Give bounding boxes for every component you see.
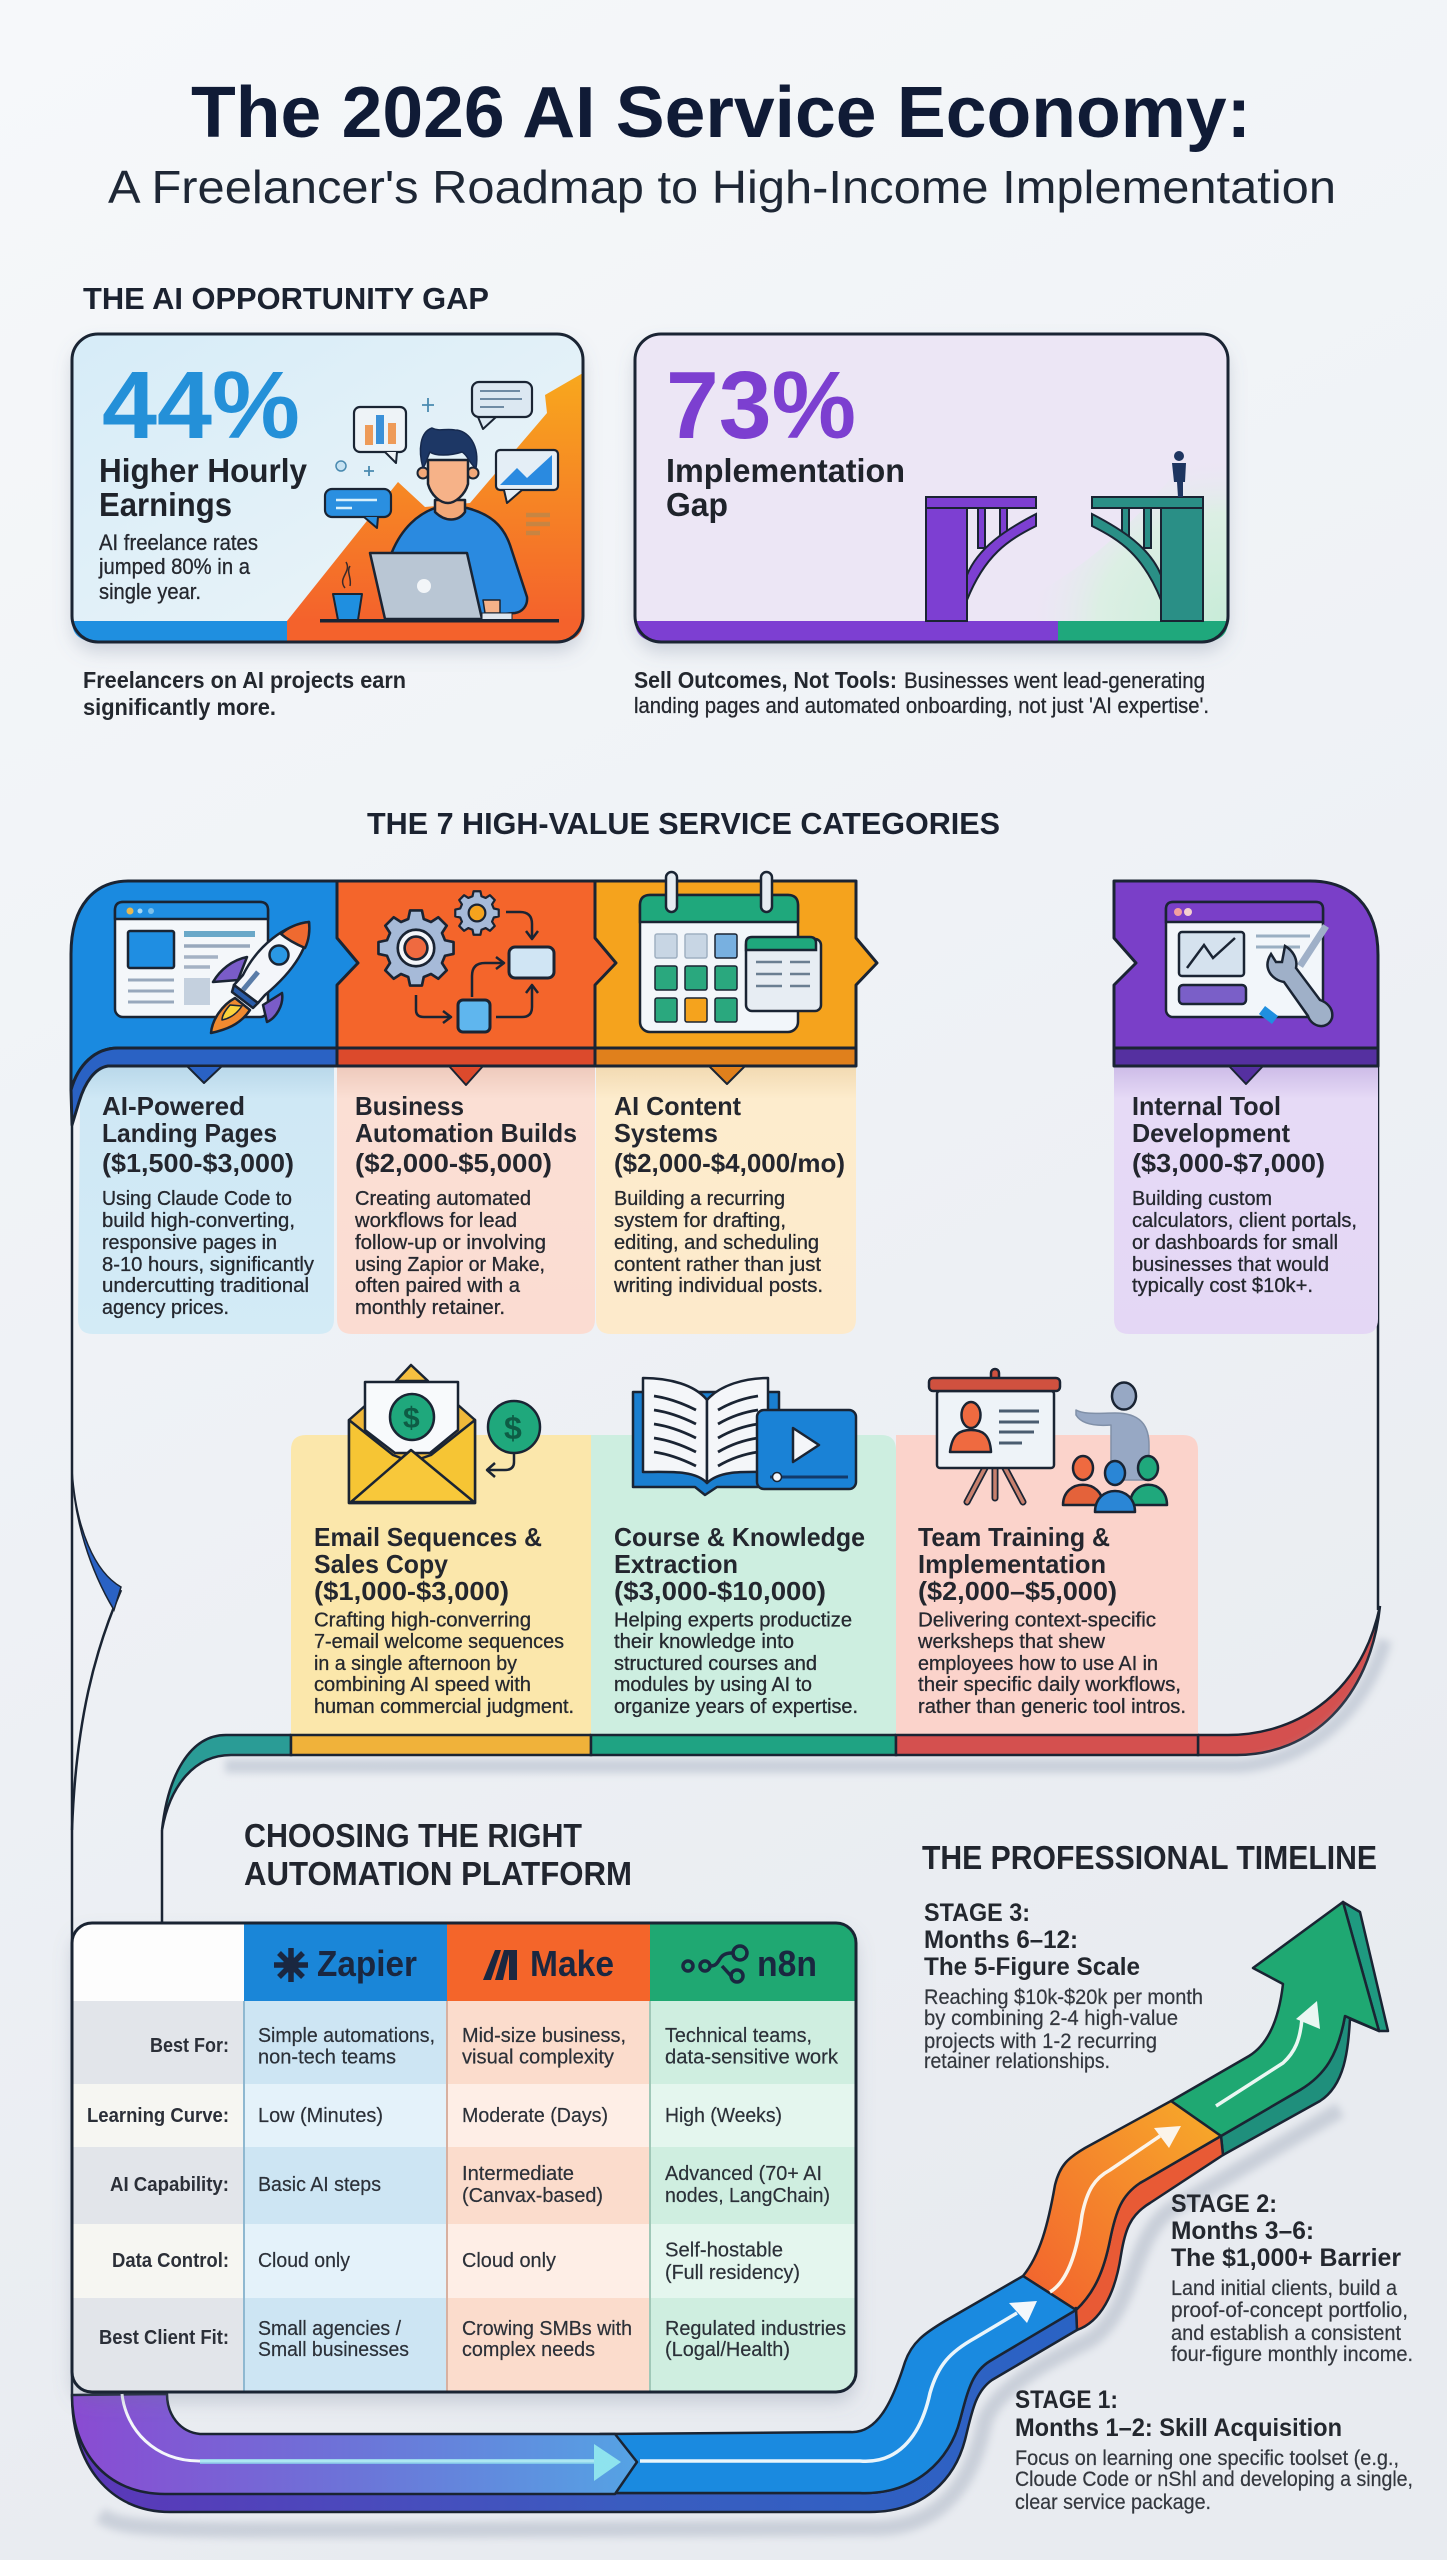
caption: sell outcomes [634,667,1209,718]
table row labels: Best Client Fit: [99,2327,229,2349]
icon: person on bridge [1172,451,1186,497]
card text: Extraction [614,1549,738,1579]
panel: team training and implementation [896,1435,1198,1755]
table body cells [72,2001,856,2392]
n8n column: Regulated industries [665,2318,846,2340]
n8n column [665,2025,846,2361]
card text: employees how to use AI in [918,1653,1158,1675]
card text: ($3,000-$7,000) [1132,1148,1325,1178]
stat label [99,452,308,523]
card text: 8-10 hours, significantly [102,1254,314,1276]
card text: undercutting traditional [102,1275,309,1297]
zapier column: Basic AI steps [258,2174,381,2196]
make column: Mid-size business, [462,2025,626,2047]
zapier column: Cloud only [258,2250,350,2272]
card text: werksheps that shew [917,1631,1106,1653]
table header: Make [530,1943,614,1984]
card text: agency prices. [102,1297,229,1319]
heading: professional timeline: THE PROFESSIONAL TIMELINE [922,1839,1377,1876]
card text: often paired with a [355,1275,521,1297]
table row labels: Best For: [150,2035,229,2057]
zapier column: Low (Minutes) [258,2105,383,2127]
icon: email envelope with money: $ [504,1410,522,1446]
card text [613,1091,845,1297]
subtitle: A Freelancer's Roadmap to High-Income Implementation [108,161,1336,213]
heading: the AI opportunity gap: THE AI OPPORTUNITY GAP [83,281,489,316]
card text: Delivering context-specific [918,1610,1156,1632]
text block: stage 3: The 5-Figure Scale [924,1953,1140,1981]
card text [314,1522,574,1718]
arrow tip side [1343,1902,1388,2031]
card text: AI Content [614,1091,741,1121]
panel: course and knowledge extraction [591,1435,896,1755]
panel: AI content systems [596,1067,856,1334]
stat: 44%: 44% [102,352,300,459]
card text: or dashboards for small [1132,1232,1338,1254]
rocket [211,922,309,1033]
zapier column: non-tech teams [258,2046,396,2068]
ribbon: roadmap stage path [72,1902,1388,2512]
caption: sell outcomes: landing pages and automated onboarding, not just 'AI expertise'. [634,693,1209,718]
card text: Landing Pages [102,1118,277,1148]
n8n column: High (Weeks) [665,2105,782,2127]
card text: Building a recurring [614,1188,785,1210]
make column: complex needs [462,2339,595,2361]
card text: their knowledge into [614,1631,794,1653]
band [896,1735,1198,1755]
table header: n8n [757,1943,817,1984]
green arrow side [1221,2016,1379,2155]
panel: business automation builds [337,1067,595,1334]
stat: 73%: 73% [666,352,856,459]
text block: stage 2 [1171,2190,1413,2366]
heading: service categories: THE 7 HIGH-VALUE SERVICE CATEGORIES [367,806,1000,841]
text block: stage 1: STAGE 1: [1015,2386,1118,2414]
card background [1114,1067,1378,1334]
card text: build high-converting, [102,1210,295,1232]
card text: writing individual posts. [613,1275,823,1297]
table row labels: AI Capability: [110,2174,229,2196]
card text: Systems [614,1118,718,1148]
n8n column: (Full residency) [665,2262,800,2284]
text block: stage 3: Months 6–12: [924,1926,1078,1954]
table header: Zapier [317,1943,417,1984]
header band: purple [1114,881,1378,1084]
arrow: stage 1 [640,2301,1037,2461]
n8n column: (Logal/Health) [665,2339,790,2361]
orange top [1023,2101,1221,2310]
card text: ($2,000-$5,000) [355,1148,552,1178]
band [591,1735,896,1755]
header band: amber [595,881,877,1084]
blue and purple side [72,2308,1077,2512]
card text: Sales Copy [314,1549,449,1579]
icon: presenter and audience [929,1369,1167,1512]
text block: stage 2: Months 3–6: [1171,2217,1314,2245]
caption: freelancers: significantly more. [83,694,276,720]
arrow: stage 3 [1216,2001,1320,2106]
icon: n8n [683,1946,747,1982]
stat label: Implementation [666,452,905,489]
card text: Automation Builds [355,1118,577,1148]
card text: structured courses and [614,1653,817,1675]
table row labels: Data Control: [112,2250,229,2272]
card text: Creating automated [355,1188,531,1210]
text block: stage 3: retainer relationships. [924,2050,1110,2073]
header band: blue [71,881,358,1125]
stat label [666,452,905,523]
text block: stage 3: Reaching $10k-$20k per month [924,1986,1203,2009]
make column: Moderate (Days) [462,2105,608,2127]
heading: choosing the right automation platform: AUTOMATION PLATFORM [244,1855,632,1892]
n8n column: Self-hostable [665,2240,783,2262]
icon: landing page and rocket [115,902,309,1033]
text block: stage 2: and establish a consistent [1171,2322,1401,2345]
card text: Crafting high-converring [314,1610,531,1632]
blue top [600,2276,1076,2493]
arrow: white path line, purple segment [122,2394,621,2481]
title: The 2026 AI Service Economy: [191,73,1251,153]
card text: Business [355,1091,464,1121]
table row labels: Learning Curve: [87,2105,229,2127]
make column: (Canvax-based) [462,2185,603,2207]
text block: stage 2: STAGE 2: [1171,2190,1277,2218]
card text: responsive pages in [102,1232,277,1254]
card text: typically cost $10k+. [1132,1275,1313,1297]
stat label: Higher Hourly [99,452,308,489]
card background [596,1067,856,1334]
card text: Course & Knowledge [614,1522,865,1552]
text block: stage 1 [1015,2386,1413,2514]
path outline: left and right rails [72,960,1378,2395]
card text: Implementation [918,1549,1106,1579]
panel: internal tool development [1114,1067,1378,1334]
card text: ($2,000–$5,000) [918,1576,1117,1606]
card text: ($1,000-$3,000) [314,1576,509,1606]
card text: human commercial judgment. [314,1696,574,1718]
icon: gears and workflow [378,891,554,1032]
n8n column: Technical teams, [665,2025,812,2047]
card text: businesses that would [1132,1254,1329,1276]
ribbon: blue sliver on left rail [72,1470,121,1610]
arrow: stage 2 [1050,2126,1181,2292]
text block: stage 1: Months 1–2: Skill Acquisition [1015,2414,1342,2442]
stat description [98,530,258,604]
card text: their specific daily workflows, [918,1674,1181,1696]
heading: choosing the right automation platform [244,1817,632,1892]
caption: sell outcomes: Businesses went lead-generating [904,668,1205,693]
card text [102,1091,314,1319]
card text: Using Claude Code to [102,1188,292,1210]
icon: zapier [274,1948,308,1982]
icon: internal tool dashboard and wrench [1166,902,1332,1026]
text block: stage 3: STAGE 3: [924,1899,1030,1927]
stat label: Earnings [99,486,232,523]
card text: Development [1132,1118,1290,1148]
card text: system for drafting, [614,1210,786,1232]
ribbon shadow [225,1640,1385,1766]
card background [291,1435,591,1735]
card text: combining AI speed with [314,1674,531,1696]
card text: in a single afternoon by [314,1653,517,1675]
text block: stage 2: Land initial clients, build a [1171,2277,1397,2300]
make column: Intermediate [462,2163,574,2185]
panel: 44% higher hourly earnings [72,334,583,642]
make column: Cloud only [462,2250,556,2272]
n8n column: data-sensitive work [665,2046,839,2068]
caption: freelancers: Freelancers on AI projects earn [83,667,406,693]
text block: stage 2: The $1,000+ Barrier [1171,2244,1401,2272]
text block: stage 3: by combining 2-4 high-value [924,2007,1178,2030]
card text [354,1091,577,1319]
icon: freelancer at laptop [320,382,559,622]
band [291,1735,591,1755]
stat description: single year. [99,579,201,604]
stat description: jumped 80% in a [98,554,251,579]
stat description: AI freelance rates [99,530,258,555]
ribbon: teal left curve [162,1735,291,1925]
card text: follow-up or involving [355,1232,546,1254]
card text: modules by using AI to [614,1674,812,1696]
text block: stage 1: Focus on learning one specific toolset (e.g., [1015,2447,1399,2470]
card background [78,1067,334,1334]
card text: Team Training & [918,1522,1110,1552]
card text [1132,1091,1357,1297]
panel: email sequences [291,1435,591,1755]
make column [462,2025,632,2361]
card text: using Zapior or Make, [355,1254,545,1276]
card text: editing, and scheduling [614,1232,819,1254]
ribbon: red right curve [1198,1606,1380,1755]
header band: orange [337,881,616,1085]
heading: choosing the right automation platform: CHOOSING THE RIGHT [244,1817,582,1854]
text block: stage 3 [924,1899,1203,2073]
icon: email envelope with money: $ [403,1402,420,1435]
zapier column: Simple automations, [258,2025,435,2047]
purple top [72,2394,637,2494]
card text: rather than generic tool intros. [918,1696,1186,1718]
panel: 73% implementation gap [635,334,1228,642]
card text: Email Sequences & [314,1522,542,1552]
card background [337,1067,595,1334]
n8n column: nodes, LangChain) [665,2185,830,2207]
n8n column: Advanced (70+ AI [665,2163,822,2185]
caption: freelancers [83,667,406,720]
card text: 7-email welcome sequences [314,1631,564,1653]
caption: sell outcomes: Sell Outcomes, Not Tools: [634,667,897,693]
icon: make [483,1950,517,1980]
card text: Building custom [1132,1188,1272,1210]
make column: visual complexity [462,2046,614,2068]
icon: content calendar [640,872,821,1032]
card text: AI-Powered [102,1091,245,1121]
icon: broken bridge [926,451,1203,621]
card text: Helping experts productize [614,1610,852,1632]
text block: stage 1: clear service package. [1015,2491,1211,2514]
icon: open book and video [633,1378,856,1495]
card background [591,1435,896,1735]
card text [614,1522,865,1718]
text block: stage 2: four-figure monthly income. [1171,2343,1413,2366]
card text: ($2,000-$4,000/mo) [614,1148,845,1178]
card text: calculators, client portals, [1132,1210,1357,1232]
card text: Internal Tool [1132,1091,1281,1121]
zapier column [258,2025,435,2361]
text block: stage 2: proof-of-concept portfolio, [1171,2299,1408,2322]
icon: email envelope with money [349,1365,540,1503]
text block: stage 3: projects with 1-2 recurring [924,2030,1157,2053]
panel: platform comparison table [72,1923,856,2392]
table row labels [87,2035,229,2349]
card background [896,1435,1198,1735]
card text: content rather than just [614,1254,821,1276]
ribbon: road side shadow [100,2110,1340,2530]
table header [72,1923,856,2001]
green arrow top [1171,1902,1379,2136]
text block: stage 1: Cloude Code or nShl and developing a single, [1015,2468,1413,2491]
panel: AI-powered landing pages [78,1067,334,1334]
card text: monthly retainer. [355,1297,505,1319]
stat label: Gap [666,486,728,523]
orange side [1076,2136,1223,2330]
card text: ($1,500-$3,000) [102,1148,294,1178]
make column: Crowing SMBs with [462,2318,632,2340]
card text: workflows for lead [354,1210,517,1232]
card text [917,1522,1186,1718]
zapier column: Small businesses [258,2339,409,2361]
card text: organize years of expertise. [614,1696,858,1718]
card text: ($3,000-$10,000) [614,1576,826,1606]
zapier column: Small agencies / [258,2318,401,2340]
